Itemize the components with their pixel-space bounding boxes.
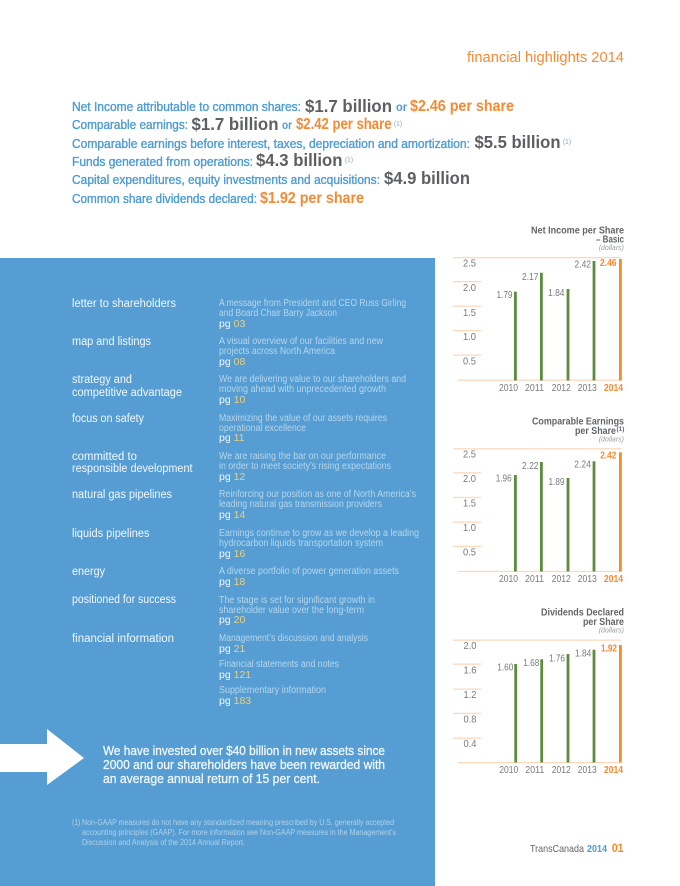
y axis labels: 0.8 [464, 714, 477, 726]
chart title: Dividends Declared [541, 608, 624, 619]
page footer: TransCanada [530, 843, 584, 855]
value labels: 2.42 [600, 450, 616, 462]
year labels: 2010 [499, 382, 518, 394]
entry: focus on safety: focus on safety [72, 413, 144, 425]
year labels [499, 573, 623, 585]
entry: focus on safety: operational excellence [219, 423, 306, 434]
entry: financial information: pg 21 [219, 643, 245, 655]
callout: 2000 and our shareholders have been rewarded with [103, 757, 385, 772]
y axis labels: 0.4 [464, 738, 477, 750]
highlight: dividends: Common share dividends declared: [72, 192, 257, 206]
footnote: (1) [72, 818, 81, 827]
entry: liquids pipelines: Earnings continue to grow as we develop a leading [219, 528, 419, 539]
entry: liquids pipelines: liquids pipelines [72, 528, 150, 540]
entry: committed to responsible development: committed to [72, 451, 137, 463]
entry: letter to shareholders: letter to shareholders [72, 298, 176, 310]
entry: committed to responsible development [72, 451, 391, 483]
y axis labels: 1.0 [463, 522, 476, 534]
value labels: 1.68 [523, 657, 539, 669]
entry: focus on safety: Maximizing the value of our assets requires [219, 413, 387, 424]
chart title: (dollars) [599, 436, 624, 444]
chart: dividends declared per share [453, 608, 624, 776]
highlight: funds generated from operations: (1) [345, 157, 353, 164]
entry: energy: A diverse portfolio of power generation assets [219, 566, 399, 577]
value labels: 2.22 [522, 460, 539, 472]
chart title: (dollars) [599, 628, 624, 634]
entry: committed to responsible development: We are raising the bar on our performance [219, 451, 386, 462]
year labels: 2011 [525, 764, 544, 776]
value labels: 1.60 [497, 662, 513, 674]
page footer: 01 [612, 841, 624, 855]
bars [514, 259, 622, 380]
highlight: net income: or [396, 102, 408, 114]
year labels: 2011 [525, 382, 544, 394]
value labels: 2.46 [600, 257, 617, 269]
entry: strategy and competitive advantage [72, 374, 406, 406]
value labels: 2.17 [522, 271, 539, 283]
panel: blue contents [0, 258, 435, 886]
entry: financial information: financial information [72, 633, 174, 645]
entry: focus on safety [72, 413, 387, 444]
entry: natural gas pipelines [72, 489, 416, 521]
value labels [497, 643, 617, 674]
highlight: comparable earnings: Comparable earnings: [72, 118, 188, 132]
highlight: comparable EBITDA: $5.5 billion [474, 132, 560, 152]
year labels: 2010 [499, 764, 518, 776]
y axis labels: 2.0 [464, 640, 477, 652]
year labels [499, 382, 623, 394]
highlight: funds generated from operations: Funds generated from operations: [72, 155, 253, 169]
entry: financial information: Financial statements and notes [219, 659, 339, 670]
page footer: 2014 [587, 843, 607, 855]
bars [514, 645, 622, 762]
year labels [499, 764, 623, 776]
entry: strategy and competitive advantage: moving ahead with unprecedented growth [219, 384, 386, 395]
year labels: 2013 [578, 382, 597, 394]
entry: energy: pg 18 [219, 576, 245, 588]
highlight: dividends: $1.92 per share [260, 190, 364, 207]
year labels: 2012 [552, 382, 571, 394]
page footer [530, 841, 624, 855]
chart: comparable earnings per share [453, 416, 624, 585]
entry: letter to shareholders: pg 03 [219, 318, 245, 330]
highlight: comparable earnings: (1) [394, 121, 402, 128]
footnote [72, 818, 396, 847]
value labels: 1.84 [575, 648, 591, 660]
entry: natural gas pipelines: pg 14 [219, 509, 245, 521]
highlight: net income: $1.7 billion [305, 96, 392, 116]
y axis labels: 2.5 [463, 448, 476, 460]
value labels: 1.96 [496, 473, 512, 485]
key financial highlights list [72, 96, 571, 207]
highlight: net income [72, 96, 514, 116]
entry: positioned for success [72, 594, 375, 626]
y axis labels: 0.5 [463, 546, 476, 558]
entry: strategy and competitive advantage: strategy and [72, 374, 132, 386]
value labels: 1.79 [496, 289, 513, 301]
entry: map and listings: pg 08 [219, 356, 245, 368]
y axis labels: 0.5 [463, 356, 476, 368]
value labels: 1.92 [601, 643, 617, 655]
highlight: comparable earnings: $1.7 billion [192, 114, 278, 134]
highlight: comparable EBITDA [72, 132, 571, 152]
entry: map and listings: map and listings [72, 336, 151, 348]
chart title: – Basic [596, 234, 624, 246]
entry: positioned for success: positioned for success [72, 594, 176, 606]
value labels [496, 257, 617, 301]
year labels: 2012 [552, 573, 571, 585]
icon: white arrow [0, 729, 84, 785]
footnote: Non-GAAP measures do not have any standardized meaning prescribed by U.S. generally accepted [82, 818, 394, 827]
y axis labels: 2.0 [463, 282, 476, 294]
entry: letter to shareholders [72, 298, 406, 330]
chart title [531, 226, 624, 252]
y axis labels: 2.0 [463, 473, 476, 485]
highlight: net income: $2.46 per share [410, 98, 514, 115]
entry: liquids pipelines [72, 528, 419, 560]
year labels: 2011 [525, 573, 544, 585]
entry: energy [72, 566, 399, 588]
highlight: comparable EBITDA: Comparable earnings before interest, taxes, depreciation and amortization: [72, 137, 470, 151]
entry: positioned for success: pg 20 [219, 614, 245, 626]
highlight: net income: Net Income attributable to common shares: [72, 100, 301, 114]
page title: financial highlights 2014 [467, 49, 624, 66]
highlight: comparable earnings: or [282, 120, 292, 132]
highlight: capital expenditures: Capital expenditures, equity investments and acquisitions: [72, 173, 380, 187]
entry: positioned for success: shareholder value over the long-term [219, 605, 364, 616]
entry: natural gas pipelines: Reinforcing our position as one of North America’s [219, 489, 416, 500]
chart title [541, 608, 624, 634]
entry: strategy and competitive advantage: We are delivering value to our shareholders and [219, 374, 406, 385]
highlight: comparable earnings: $2.42 per share [296, 116, 392, 133]
entry: financial information: Management’s discussion and analysis [219, 633, 368, 644]
value labels: 1.89 [548, 476, 565, 488]
value labels: 2.24 [574, 459, 591, 471]
y axis labels: 1.2 [464, 689, 477, 701]
year labels: 2010 [499, 573, 518, 585]
chart title [532, 416, 624, 444]
chart title: per Share [575, 426, 616, 437]
y axis labels: 1.0 [463, 331, 476, 343]
chart title: Net Income per Share [531, 226, 624, 236]
y axis labels: 2.5 [463, 258, 476, 270]
entry: committed to responsible development: responsible development [72, 463, 193, 475]
chart title: (1) [616, 426, 624, 433]
entry: focus on safety: pg 11 [219, 432, 245, 444]
y axis labels [463, 258, 476, 368]
entry: financial information [72, 633, 368, 707]
entry: financial information: pg 183 [219, 695, 251, 707]
entry: strategy and competitive advantage: pg 10 [219, 394, 245, 406]
highlight: funds generated from operations: $4.3 billion [256, 150, 342, 170]
entry: map and listings: A visual overview of our facilities and new [219, 336, 384, 347]
entry: map and listings [72, 336, 384, 368]
entry: natural gas pipelines: leading natural gas transmission providers [219, 499, 382, 510]
year labels: 2012 [552, 764, 571, 776]
callout [103, 743, 385, 786]
entry: natural gas pipelines: natural gas pipelines [72, 489, 172, 501]
y axis labels: 1.5 [463, 498, 476, 510]
entry: letter to shareholders: and Board Chair Barry Jackson [219, 308, 337, 319]
entry: positioned for success: The stage is set for significant growth in [219, 595, 375, 606]
highlight: capital expenditures: $4.9 billion [384, 168, 470, 188]
value labels [496, 450, 616, 488]
value labels: 1.84 [548, 287, 565, 299]
year labels: 2013 [578, 573, 597, 585]
footnote: Discussion and Analysis of the 2014 Annual Report. [82, 838, 245, 847]
entry: committed to responsible development: pg 12 [219, 471, 245, 483]
bars [514, 452, 622, 572]
entry: financial information: pg 121 [219, 669, 251, 681]
value labels: 1.76 [549, 653, 565, 665]
year labels: 2014 [604, 573, 623, 585]
y axis labels: 1.5 [463, 307, 476, 319]
entry: liquids pipelines: hydrocarbon liquids transportation system [219, 538, 383, 549]
y axis labels [464, 640, 477, 750]
entry: financial information: Supplementary information [219, 685, 326, 696]
footnote: accounting principles (GAAP). For more information see Non-GAAP measures in the Management’s [82, 828, 396, 837]
year labels: 2013 [578, 764, 597, 776]
entry: energy: energy [72, 566, 105, 578]
chart title: (dollars) [599, 245, 624, 252]
contents list [72, 298, 419, 707]
chart title: Comparable Earnings [532, 416, 624, 428]
chart title: per Share [583, 617, 624, 628]
entry: committed to responsible development: in order to meet society’s rising expectations [219, 461, 391, 472]
highlight: comparable earnings [72, 114, 402, 134]
entry: liquids pipelines: pg 16 [219, 548, 245, 560]
highlight: capital expenditures [72, 168, 470, 188]
highlight: comparable EBITDA: (1) [563, 139, 571, 146]
value labels: 2.42 [574, 258, 591, 270]
callout: We have invested over $40 billion in new assets since [103, 743, 385, 758]
highlight: funds generated from operations [72, 150, 353, 170]
entry: map and listings: projects across North America [219, 346, 335, 357]
callout: an average annual return of 15 per cent. [103, 771, 320, 786]
year labels: 2014 [604, 764, 623, 776]
highlight: dividends [72, 190, 364, 207]
chart: net income per share [453, 226, 624, 394]
entry: strategy and competitive advantage: competitive advantage [72, 387, 182, 399]
year labels: 2014 [604, 382, 623, 394]
y axis labels: 1.6 [464, 665, 477, 677]
entry: letter to shareholders: A message from President and CEO Russ Girling [219, 298, 406, 309]
y axis labels [463, 448, 476, 558]
